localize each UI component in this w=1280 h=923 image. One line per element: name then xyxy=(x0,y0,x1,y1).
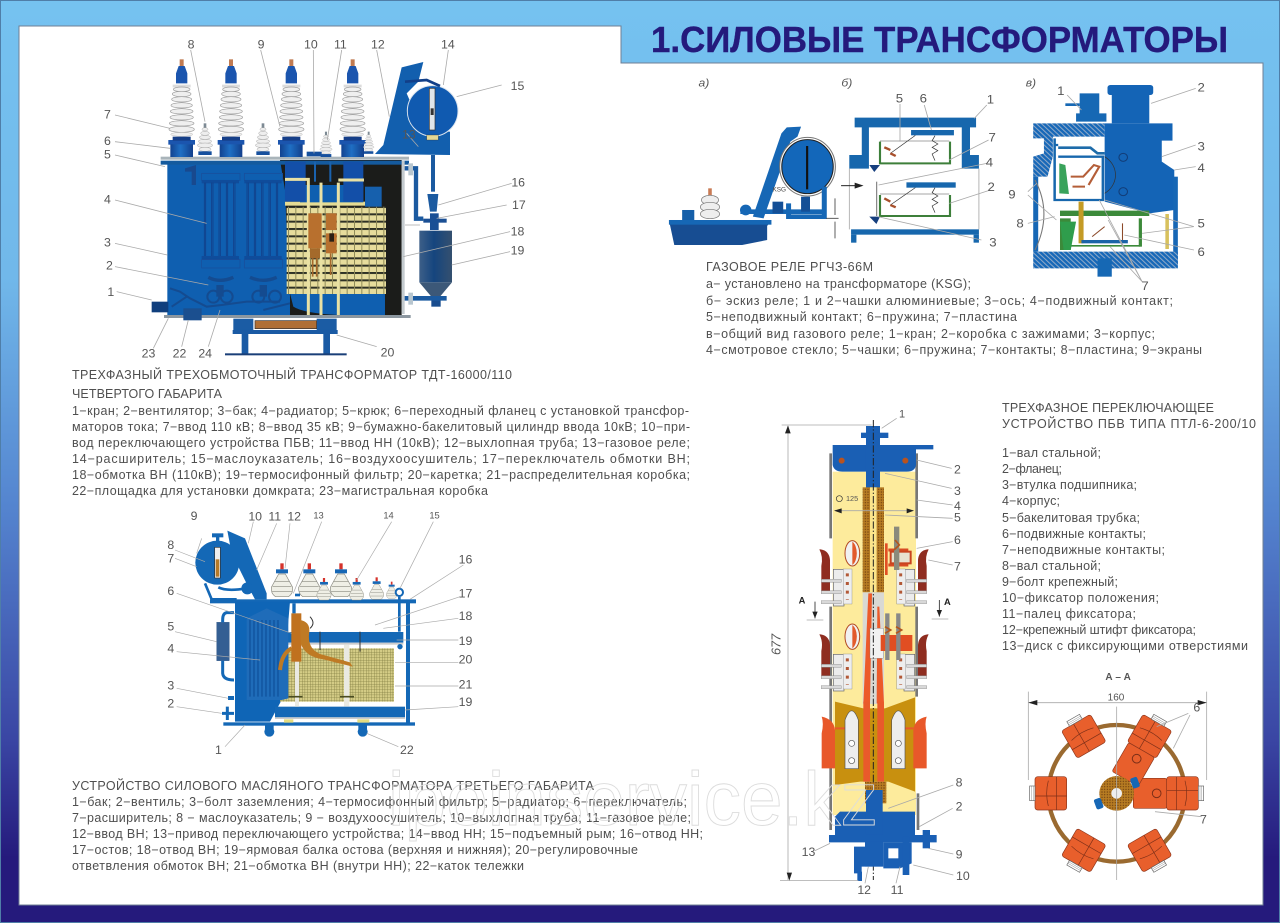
watermark: ipoinservice.kz xyxy=(388,757,878,842)
text block: transformer TDT-16000/110: 1−кран; 2−вентилятор; 3−бак; 4−радиатор; 5−крюк; 6−переходный фланец с установкой трансфор- xyxy=(72,404,689,418)
fixed contact blocks xyxy=(1030,710,1204,877)
callout numbers: 19 xyxy=(459,695,473,709)
text block: oil transformer: 17−остов; 18−отвод ВН; 19−ярмовая балка остова (верхняя и нижняя); 20−регулировочные xyxy=(72,843,638,857)
drain valve xyxy=(152,302,168,312)
variant б: relay sketch: б) xyxy=(841,77,852,90)
text block: tap changer legend: 13−диск с фиксирующими отверстиями xyxy=(1002,639,1248,653)
variant б: relay sketch: 1 xyxy=(987,92,994,106)
text block: gas relay xyxy=(706,260,1202,357)
central shaft xyxy=(863,420,886,880)
valves and pipes xyxy=(170,277,290,310)
callout numbers: 11 xyxy=(891,883,904,897)
diagram: oil transformer third dimension xyxy=(167,509,473,757)
callout numbers: 14 xyxy=(441,37,455,51)
text block: oil transformer: 1−бак; 2−вентиль; 3−болт заземления; 4−термосифонный фильтр; 5−радиатор; 6−переключатель; xyxy=(72,795,687,809)
callout numbers: 7 xyxy=(167,551,174,565)
callout numbers: 1 xyxy=(899,408,905,420)
callout numbers: А xyxy=(799,595,806,605)
callout numbers: 4 xyxy=(167,642,174,656)
callout numbers: 11 xyxy=(268,510,281,524)
variant а: relay installed: KSG xyxy=(772,187,786,194)
window slots and perforated strips xyxy=(843,541,905,689)
callout numbers: 24 xyxy=(198,346,212,360)
callout numbers: 9 xyxy=(191,509,198,523)
dimension lines xyxy=(780,425,948,881)
bakelite tube xyxy=(833,472,916,815)
text block: tap changer legend: 4−корпус; xyxy=(1002,494,1060,508)
variant а: relay installed xyxy=(669,77,839,245)
callout numbers: 677 xyxy=(770,633,784,655)
callout numbers: 21 xyxy=(459,677,473,691)
section title: А – А xyxy=(1105,672,1131,683)
callout numbers: 20 xyxy=(381,346,395,360)
callout numbers: 16 xyxy=(459,552,473,566)
callout numbers: 22 xyxy=(400,743,414,757)
callout numbers: 20 xyxy=(459,652,473,666)
variant в: general view: 6 xyxy=(1197,244,1205,259)
callout numbers: 23 xyxy=(142,346,156,360)
text block: oil transformer: 7−расширитель; 8 − маслоуказатель; 9 − воздухоосушитель; 10−выхлопная труба; 11−газовое реле; xyxy=(72,811,691,825)
dimension and callouts xyxy=(1028,692,1207,880)
text block: gas relay: а− установлено на трансформаторе (KSG); xyxy=(706,277,971,291)
yoke beams xyxy=(275,632,405,723)
text block: tap changer legend: 5−бакелитовая трубка; xyxy=(1002,511,1140,525)
breather and thermosyphon filter xyxy=(405,155,452,307)
callout numbers: 5 xyxy=(167,620,174,634)
movable contacts xyxy=(881,527,912,660)
variant в: general view: 9 xyxy=(1008,187,1016,201)
dimension and callouts: 160 xyxy=(1108,693,1125,704)
callout numbers: 12 xyxy=(371,37,385,51)
text block: transformer TDT-16000/110 xyxy=(72,367,690,498)
carriage with rail xyxy=(225,319,347,355)
expander with exhaust pipe xyxy=(375,62,458,155)
variant в: general view: 2 xyxy=(1197,80,1205,95)
callout numbers: 10 xyxy=(304,37,318,51)
dimension and callouts: 6 xyxy=(1193,701,1200,715)
callout numbers: 2 xyxy=(956,799,963,813)
text block: oil transformer xyxy=(72,778,703,873)
transformer tank xyxy=(161,157,411,318)
side walls xyxy=(831,453,918,830)
callout numbers: 9 xyxy=(956,848,963,862)
callout numbers: 12 xyxy=(857,883,871,897)
contact groups xyxy=(819,549,929,691)
text block: tap changer legend: 10−фиксатор положения; xyxy=(1002,591,1159,605)
variant в: general view xyxy=(1008,77,1205,293)
thermosiphon filter xyxy=(217,613,234,720)
variant б: relay sketch: 4 xyxy=(986,155,993,170)
text block: tap changer legend: 1−вал стальной; xyxy=(1002,446,1101,460)
text block: oil transformer: 12−ввод ВН; 13−привод переключающего устройства; 14−ввод НН; 15−подъемный рым; 16−отвод НН; xyxy=(72,827,703,841)
variant в: general view: 1 xyxy=(1057,83,1064,98)
text block: transformer TDT-16000/110: ЧЕТВЕРТОГО ГАБАРИТА xyxy=(72,387,223,401)
callout numbers: А xyxy=(944,597,951,607)
callout numbers: 3 xyxy=(104,236,111,250)
text block: transformer TDT-16000/110: 22−площадка для установки домкрата; 23−магистральная коробка xyxy=(72,484,488,498)
tap changer xyxy=(280,603,360,670)
variant а: relay installed: а) xyxy=(699,77,709,90)
diagram: tap changer PTL-6-200/10 xyxy=(770,408,970,897)
text block: tap changer legend: 6−подвижные контакты; xyxy=(1002,527,1146,541)
text block: transformer TDT-16000/110: 18−обмотка ВН (110кВ); 19−термосифонный фильтр; 20−каретка; 21−распределительная коробка; xyxy=(72,468,690,482)
bushings xyxy=(271,563,403,649)
callout numbers: 14 xyxy=(383,511,394,521)
text block: tap changer legend xyxy=(1002,401,1256,653)
text block: gas relay: ГАЗОВОЕ РЕЛЕ РГЧЗ-66М xyxy=(706,260,873,274)
callout numbers: 6 xyxy=(104,134,111,148)
radiator xyxy=(247,608,288,700)
diagram: three-winding transformer TDT-16000/110 xyxy=(104,37,526,360)
callout numbers: 10 xyxy=(248,510,262,524)
callout numbers: 5 xyxy=(104,147,111,161)
variant б: relay sketch: 2 xyxy=(987,179,995,194)
callout numbers: 8 xyxy=(956,776,963,790)
text block: tap changer legend: 2−фланец; xyxy=(1002,462,1062,476)
low-voltage bushings xyxy=(197,123,374,157)
dimension and callouts: 7 xyxy=(1200,812,1207,826)
dark band xyxy=(835,697,915,792)
radiators xyxy=(202,173,283,268)
callout numbers: 2 xyxy=(106,258,113,272)
callout numbers: 18 xyxy=(511,225,525,239)
callout numbers: 11 xyxy=(334,37,347,51)
variant в: general view: 8 xyxy=(1016,216,1024,230)
variant б: relay sketch: 3 xyxy=(989,235,997,250)
bottom flange and mechanism xyxy=(829,790,937,881)
callout numbers: 16 xyxy=(511,176,525,190)
text block: transformer TDT-16000/110: 14−расширитель; 15−маслоуказатель; 16−воздухоосушитель; 17−переключатель обмотки ВН; xyxy=(72,452,690,466)
text block: tap changer legend: 11−палец фиксатора; xyxy=(1002,607,1136,621)
callout numbers: 19 xyxy=(511,244,525,258)
text block: gas relay: б− эскиз реле; 1 и 2−чашки алюминиевые; 3−ось; 4−подвижный контакт; xyxy=(706,294,1173,308)
callout numbers: 13 xyxy=(402,127,416,141)
variant б: relay sketch: 7 xyxy=(989,130,996,145)
callout numbers: 18 xyxy=(459,609,473,623)
variant в: general view: 7 xyxy=(1141,278,1149,293)
callout numbers: 2 xyxy=(954,462,961,476)
variant б: relay sketch: 6 xyxy=(920,91,927,106)
leader lines xyxy=(175,522,463,747)
text block: transformer TDT-16000/110: вод переключающего устройства ПБВ; 11−ввод НН (10кВ); 12−выхлопная труба; 13−газовое реле; xyxy=(72,436,690,450)
callout numbers: 2 xyxy=(167,697,174,711)
text block: tap changer legend: 7−неподвижные контакты; xyxy=(1002,543,1165,557)
callout numbers: 8 xyxy=(188,37,195,51)
callout numbers xyxy=(104,37,526,360)
text block: tap changer legend: 9−болт крепежный; xyxy=(1002,575,1118,589)
callout numbers: 13 xyxy=(802,845,816,859)
diagram: gas relay (а, б, в) xyxy=(669,77,1205,293)
leader lines xyxy=(115,50,512,348)
callout numbers: 10 xyxy=(956,869,970,883)
variant б: relay sketch xyxy=(841,77,997,250)
windings cutaway xyxy=(285,162,386,315)
lower contacts xyxy=(822,711,927,769)
callout numbers: 125 xyxy=(846,494,858,503)
callout numbers xyxy=(167,509,473,757)
callout numbers xyxy=(770,408,970,897)
text block: transformer TDT-16000/110: ТРЕХФАЗНЫЙ ТРЕХОБМОТОЧНЫЙ ТРАНСФОРМАТОР ТДТ-16000/110 xyxy=(72,367,512,382)
callout numbers: 7 xyxy=(954,560,961,574)
tank and frame xyxy=(210,599,416,726)
callout numbers: 5 xyxy=(954,511,961,525)
ring of bakelite xyxy=(1048,725,1185,862)
diagram: section A-A xyxy=(1028,672,1207,880)
text block: tap changer legend: ТРЕХФАЗНОЕ ПЕРЕКЛЮЧАЮЩЕЕ xyxy=(1002,401,1214,415)
text block: oil transformer: УСТРОЙСТВО СИЛОВОГО МАСЛЯНОГО ТРАНСФОРМАТОРА ТРЕТЬЕГО ГАБАРИТА xyxy=(72,778,595,793)
callout numbers: 17 xyxy=(459,586,473,600)
variant в: general view: 5 xyxy=(1197,216,1205,230)
text block: gas relay: 5−неподвижный контакт; 6−пружина; 7−пластина xyxy=(706,310,1017,324)
top flange and shaft xyxy=(833,426,933,491)
winding grid xyxy=(280,648,394,702)
callout numbers: 22 xyxy=(173,346,187,360)
variant б: relay sketch: 5 xyxy=(896,91,903,106)
callout numbers: 13 xyxy=(313,511,324,521)
callout numbers: 15 xyxy=(511,79,525,93)
text block: tap changer legend: УСТРОЙСТВО ПБВ ТИПА ПТЛ-6-200/10 xyxy=(1002,416,1256,431)
callout numbers: 7 xyxy=(104,107,111,121)
callout numbers: 1 xyxy=(215,743,222,757)
text block: tap changer legend: 8−вал стальной; xyxy=(1002,559,1101,573)
text block: transformer TDT-16000/110: маторов тока; 7−ввод 110 кВ; 8−ввод 35 кВ; 9−бумажно-бакелитовый цилиндр ввода 10кВ; 10−при- xyxy=(72,420,690,434)
variant в: general view: в) xyxy=(1026,77,1036,90)
callout numbers: 9 xyxy=(258,37,265,51)
expander and pipes xyxy=(195,531,267,599)
text block: tap changer legend: 12−крепежный штифт фиксатора; xyxy=(1002,623,1196,637)
callout numbers: 1 xyxy=(107,285,114,299)
movable contacts xyxy=(1112,743,1167,808)
variant в: general view: 3 xyxy=(1197,139,1205,154)
callout numbers: 8 xyxy=(167,538,174,552)
trolley wheels xyxy=(264,725,368,737)
text block: gas relay: в−общий вид газового реле; 1−кран; 2−коробка с зажимами; 3−корпус; xyxy=(706,327,1155,341)
callout numbers: 4 xyxy=(954,499,961,513)
text block: oil transformer: ответвления обмоток ВН; 21−обмотка ВН (внутри НН); 22−каток тележки xyxy=(72,859,524,873)
callout numbers: 4 xyxy=(104,192,111,206)
centre hub xyxy=(1093,776,1140,811)
callout numbers: 6 xyxy=(954,533,961,547)
high-voltage bushings xyxy=(168,59,366,157)
text block: tap changer legend: 3−втулка подшипника; xyxy=(1002,478,1137,492)
callout numbers: 19 xyxy=(459,634,473,648)
callout numbers: 12 xyxy=(287,510,301,524)
callout numbers: 17 xyxy=(512,198,526,212)
callout numbers: 3 xyxy=(954,484,961,498)
callout numbers: 15 xyxy=(429,511,440,521)
variant в: general view: 4 xyxy=(1197,160,1205,175)
callout numbers: 6 xyxy=(167,584,174,598)
title: 1.СИЛОВЫЕ ТРАНСФОРМАТОРЫ xyxy=(651,19,1228,60)
callout numbers: 3 xyxy=(167,678,174,692)
jack platform xyxy=(183,308,202,320)
text block: gas relay: 4−смотровое стекло; 5−чашки; 6−пружина; 7−контакты; 8−пластина; 9−экраны xyxy=(706,343,1202,357)
